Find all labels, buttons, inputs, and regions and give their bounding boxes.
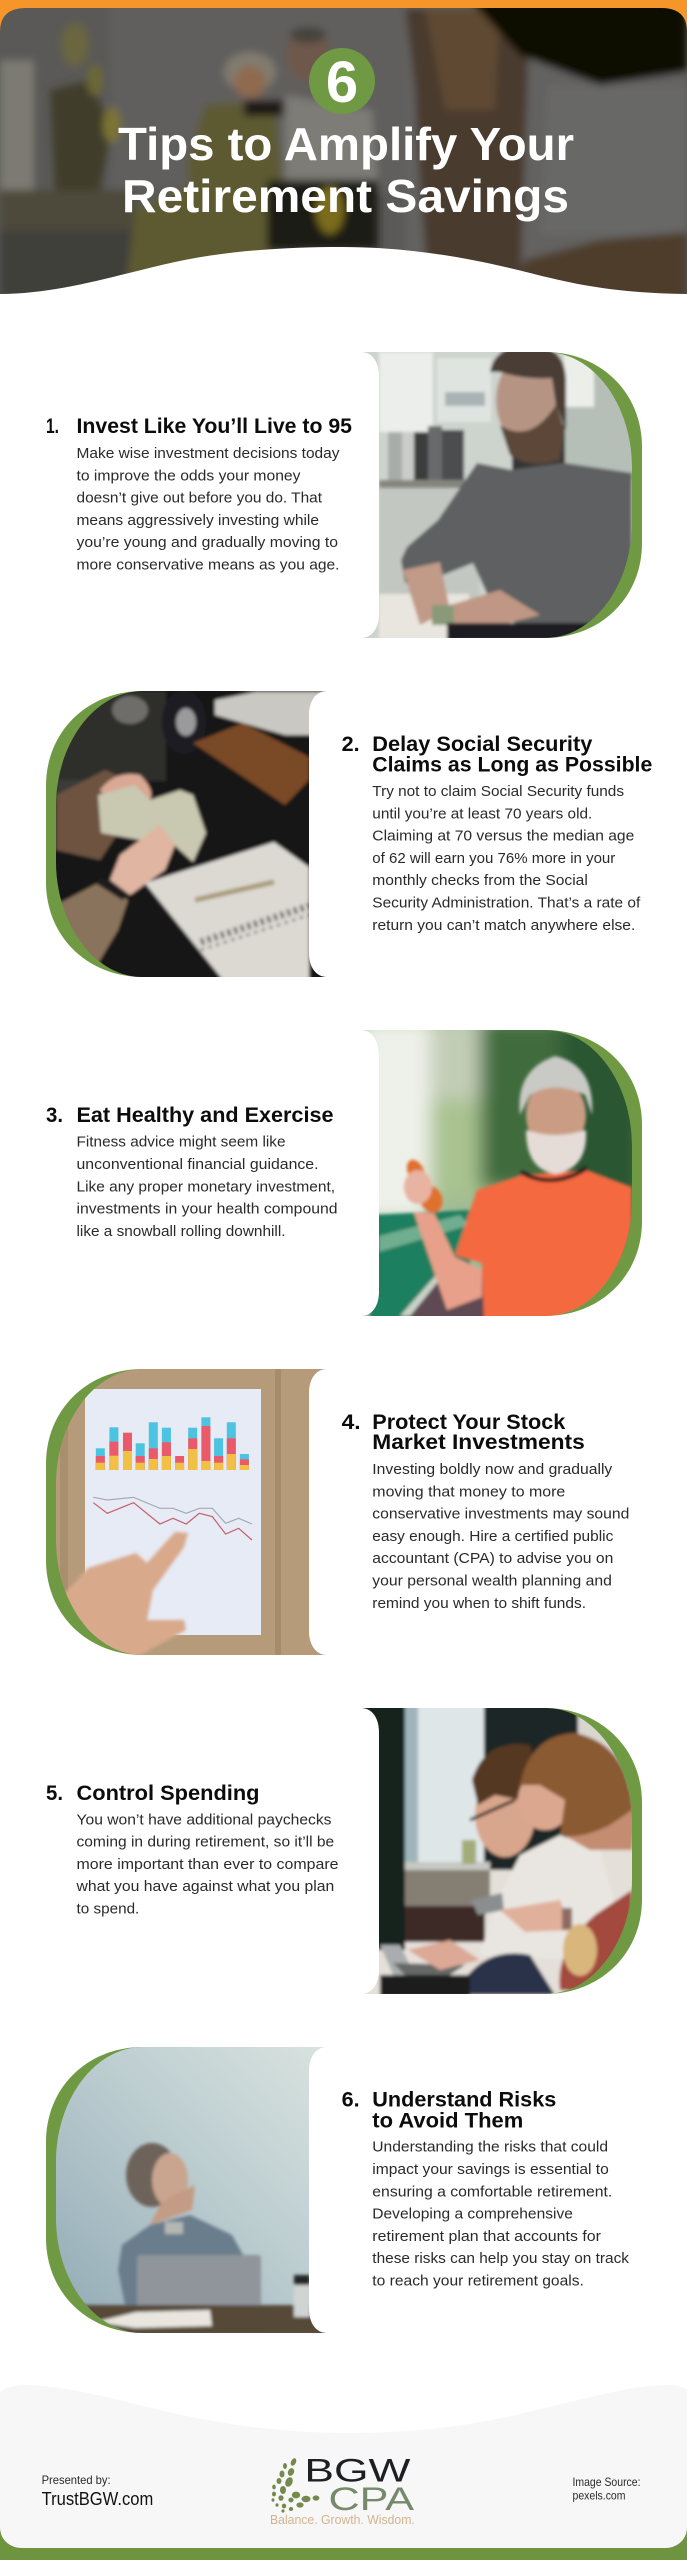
logo wordmark BGW: BGW	[304, 2453, 412, 2489]
footer	[0, 2385, 687, 2560]
tip 3 body	[76, 1134, 338, 1240]
tip 4 heading	[372, 1411, 585, 1454]
tip 6 body: retirement plan that accounts for	[372, 2228, 601, 2245]
header photo: couple taking a selfie	[0, 0, 687, 300]
tip 2 body: Security Administration. That’s a rate of	[372, 894, 641, 912]
tip 2 body: until you’re at least 70 years old.	[372, 805, 592, 822]
tip 3 body: like a snowball rolling downhill.	[76, 1223, 286, 1240]
image source	[572, 2475, 640, 2502]
tip 6 body: Understanding the risks that could	[372, 2139, 608, 2156]
tip 5 body: what you have against what you plan	[75, 1878, 334, 1895]
tip 6 body	[372, 2139, 630, 2290]
panel: tip 6	[46, 2040, 630, 2340]
tip 5 body: You won’t have additional paychecks	[76, 1811, 332, 1828]
number badge	[309, 48, 375, 115]
tip 1 body: doesn’t give out before you do. That	[76, 490, 323, 507]
tip 6 body: to reach your retirement goals.	[372, 2272, 584, 2290]
photo: hands counting cash over notebook	[50, 685, 335, 985]
tip 4 body: Investing boldly now and gradually	[372, 1461, 613, 1478]
presented by: TrustBGW.com	[42, 2489, 153, 2509]
tip 1 body: more conservative means as you age.	[76, 556, 340, 574]
bar chart on paper	[96, 1417, 249, 1470]
logo: BGW CPA	[270, 2453, 415, 2527]
tip 5 body	[75, 1811, 338, 1918]
presented by	[42, 2473, 153, 2509]
image source: pexels.com	[572, 2488, 626, 2502]
footer green band	[0, 2500, 687, 2560]
title	[118, 118, 574, 222]
title: Retirement Savings	[122, 170, 569, 222]
tip 1 number: 1.	[46, 415, 59, 438]
tip 4 number: 4.	[342, 1411, 361, 1434]
tip 2 heading	[372, 733, 652, 777]
tip 4 body: easy enough. Hire a certified public	[372, 1528, 614, 1545]
tip 5 body: coming in during retirement, so it’ll be	[76, 1834, 334, 1851]
tip 5 number: 5.	[46, 1782, 63, 1805]
image source: Image Source:	[572, 2475, 640, 2489]
tip 1 body	[76, 445, 340, 574]
tip 4 heading: Market Investments	[372, 1431, 585, 1454]
tip 6 number: 6.	[342, 2089, 360, 2112]
tip 6 body: Developing a comprehensive	[372, 2206, 573, 2223]
photo: man counting money at desk	[362, 352, 632, 638]
tip 1 body: means aggressively investing while	[76, 512, 319, 529]
photo: couple shopping online	[362, 1708, 632, 1994]
tip 4 heading: Protect Your Stock	[372, 1411, 566, 1434]
tip 3 body: unconventional financial guidance.	[76, 1156, 318, 1173]
panel: tip 2	[46, 685, 652, 985]
panel: tip 4	[46, 1360, 629, 1660]
pointing hand	[61, 1532, 188, 1660]
tip 4 body: remind you when to shift funds.	[372, 1595, 586, 1612]
green crescent 1	[545, 352, 642, 638]
tip 3 heading: Eat Healthy and Exercise	[76, 1104, 334, 1127]
number badge: 6	[326, 50, 358, 115]
green crescent 2	[46, 691, 143, 977]
tip 6 body: ensuring a comfortable retirement.	[372, 2183, 612, 2200]
tip 2 body: monthly checks from the Social	[372, 872, 588, 889]
tip 4 body	[372, 1461, 629, 1612]
tip 6 heading	[372, 2089, 556, 2132]
panel: tip 3	[46, 1020, 650, 1330]
tip 2 body: return you can’t match anywhere else.	[372, 917, 635, 934]
tip 2 heading: Claims as Long as Possible	[372, 754, 652, 777]
presented by: Presented by:	[42, 2473, 111, 2487]
panel: tip 5	[46, 1700, 645, 2000]
green crescent 6	[46, 2047, 143, 2333]
tip 6 body: these risks can help you stay on track	[372, 2250, 630, 2267]
tip 3 body: investments in your health compound	[76, 1201, 338, 1218]
green crescent 4	[46, 1369, 143, 1655]
tip 6 body: impact your savings is essential to	[372, 2161, 609, 2178]
tip 2 heading: Delay Social Security	[372, 733, 593, 756]
header white wave	[0, 247, 687, 310]
tip 3 body: Like any proper monetary investment,	[76, 1178, 335, 1195]
tip 4 body: moving that money to more	[372, 1483, 565, 1500]
tip 5 body: more important than ever to compare	[76, 1856, 338, 1873]
green crescent 3	[545, 1030, 642, 1316]
tip 3 body: Fitness advice might seem like	[76, 1134, 286, 1151]
tip 2 body: Try not to claim Social Security funds	[372, 783, 624, 800]
tip 1 body: Make wise investment decisions today	[76, 445, 340, 462]
tip 6 heading: to Avoid Them	[372, 2109, 523, 2132]
green crescent 5	[545, 1708, 642, 1994]
tip 3 number: 3.	[46, 1104, 63, 1127]
tip 2 body: of 62 will earn you 76% more in your	[372, 850, 615, 867]
logo mark: dots	[272, 2457, 319, 2513]
line chart on paper	[93, 1497, 252, 1540]
tip 5 body: to spend.	[76, 1900, 139, 1918]
tip 4 body: conservative investments may sound	[372, 1506, 629, 1523]
tip 2 number: 2.	[342, 733, 360, 756]
photo: man thinking at laptop	[50, 2040, 335, 2340]
tip 4 body: your personal wealth planning and	[372, 1572, 612, 1590]
panel: tip 1	[46, 345, 645, 645]
logo tagline: Balance. Growth. Wisdom.	[270, 2513, 415, 2527]
tip 2 body: Claiming at 70 versus the median age	[372, 828, 634, 845]
logo wordmark CPA: CPA	[328, 2481, 415, 2517]
footer panel	[0, 2385, 687, 2548]
tip 2 body	[372, 783, 641, 934]
photo: hand pointing at printed charts	[50, 1360, 335, 1660]
tip 1 body: to improve the odds your money	[76, 467, 301, 484]
top orange band	[0, 0, 687, 40]
tip 4 body: accountant (CPA) to advise you on	[372, 1550, 613, 1567]
tip 6 heading: Understand Risks	[372, 2089, 556, 2112]
tip 1 body: you’re young and gradually moving to	[76, 534, 338, 551]
title: Tips to Amplify Your	[118, 118, 574, 170]
tip 5 heading: Control Spending	[76, 1782, 260, 1805]
header panel	[0, 0, 687, 310]
photo: older man lifting dumbbell	[362, 1030, 632, 1316]
tip 1 heading: Invest Like You’ll Live to 95	[76, 415, 352, 438]
